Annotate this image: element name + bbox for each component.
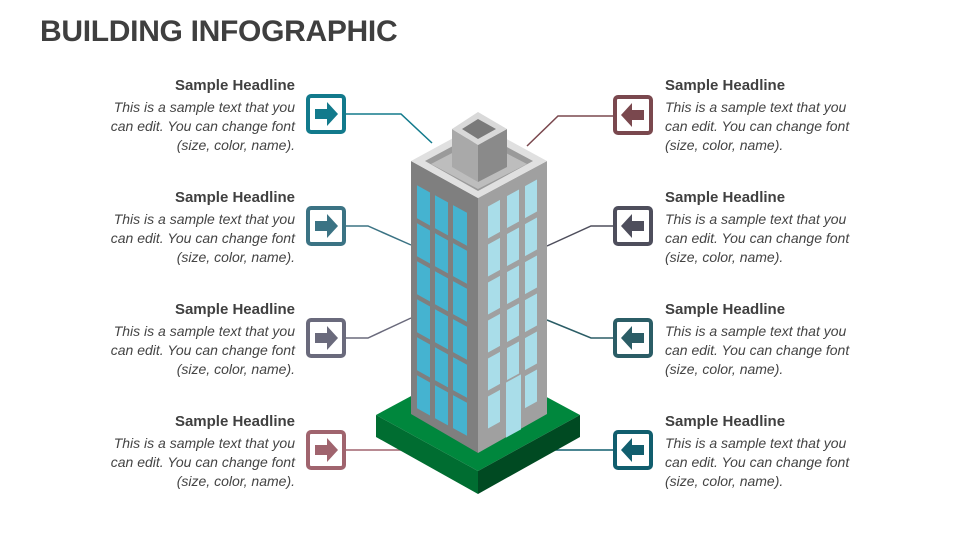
chimney	[452, 129, 478, 182]
text: right 2	[665, 189, 850, 265]
text: right 3: This is a sample text that you	[665, 323, 846, 339]
windows left face	[417, 185, 467, 436]
text: left 4: Sample Headline	[175, 413, 295, 430]
text: left 3: can edit. You can change font	[111, 342, 295, 358]
text: right 1	[665, 77, 850, 153]
icon: right arrow 3	[308, 320, 344, 356]
text: right 1: Sample Headline	[665, 77, 785, 94]
icon: right arrow 1	[308, 96, 344, 132]
text: right 2: (size, color, name).	[665, 249, 783, 265]
text: left 2: Sample Headline	[175, 189, 295, 206]
text: left 2: can edit. You can change font	[111, 230, 295, 246]
text: left 1: This is a sample text that you	[114, 99, 295, 115]
windows right face	[488, 180, 537, 448]
text: right 4: can edit. You can change font	[665, 454, 849, 470]
text: right 4: This is a sample text that you	[665, 435, 846, 451]
icon: right arrow 4	[308, 432, 344, 468]
text: left 4: can edit. You can change font	[111, 454, 295, 470]
text: left 1: can edit. You can change font	[111, 118, 295, 134]
text: right 3: Sample Headline	[665, 301, 785, 318]
text: right 3: (size, color, name).	[665, 361, 783, 377]
text: left 2: (size, color, name).	[177, 249, 295, 265]
icon: left arrow 4	[615, 432, 651, 468]
text: right 4: Sample Headline	[665, 413, 785, 430]
text: left 4: (size, color, name).	[177, 473, 295, 489]
text: right 1: This is a sample text that you	[665, 99, 846, 115]
text: left 1	[111, 77, 296, 153]
text: right 4: (size, color, name).	[665, 473, 783, 489]
text: right 2: can edit. You can change font	[665, 230, 849, 246]
icon: left arrow 3	[615, 320, 651, 356]
text: left 4	[111, 413, 296, 489]
text: right 3	[665, 301, 850, 377]
text: left 3: Sample Headline	[175, 301, 295, 318]
text: left 2	[111, 189, 296, 265]
text: left 1: Sample Headline	[175, 77, 295, 94]
title: BUILDING INFOGRAPHIC	[40, 15, 397, 48]
text: right 4	[665, 413, 850, 489]
icon: left arrow 1	[615, 97, 651, 133]
text: left 1: (size, color, name).	[177, 137, 295, 153]
text: left 2: This is a sample text that you	[114, 211, 295, 227]
connector lines	[345, 114, 614, 450]
text: left 3	[111, 301, 296, 377]
text: left 4: This is a sample text that you	[114, 435, 295, 451]
text: right 1: (size, color, name).	[665, 137, 783, 153]
text: left 3: (size, color, name).	[177, 361, 295, 377]
green base	[376, 360, 580, 494]
text: right 2: Sample Headline	[665, 189, 785, 206]
building	[411, 112, 547, 453]
text: right 2: This is a sample text that you	[665, 211, 846, 227]
text: right 3: can edit. You can change font	[665, 342, 849, 358]
text: right 1: can edit. You can change font	[665, 118, 849, 134]
icon: right arrow 2	[308, 208, 344, 244]
text: left 3: This is a sample text that you	[114, 323, 295, 339]
icon: left arrow 2	[615, 208, 651, 244]
